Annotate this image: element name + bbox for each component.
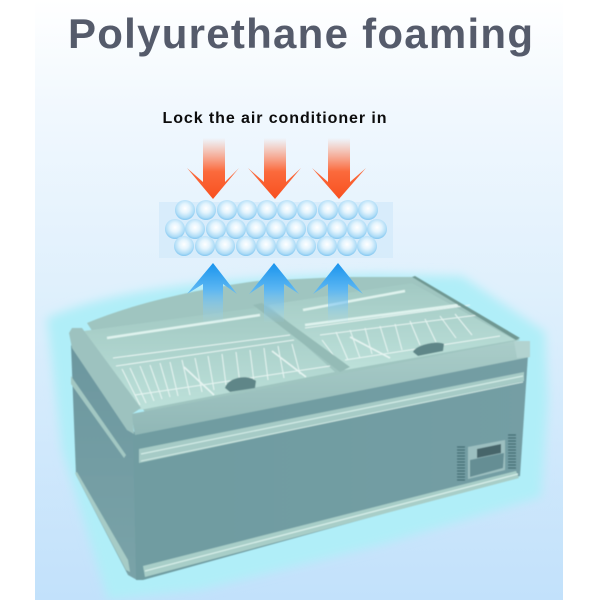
- back and right glass frame: [412, 276, 520, 340]
- right lid handle: [413, 343, 444, 356]
- freezer: [69, 276, 530, 580]
- centre divider rail: [253, 303, 350, 372]
- freezer left side face: [71, 345, 137, 580]
- foam bubbles: [165, 200, 387, 256]
- display and keypad: [468, 440, 505, 479]
- lower front trim: [143, 471, 519, 577]
- red arrows pointing down: [187, 138, 366, 199]
- right glass lid: [268, 283, 515, 370]
- left basket wire grid: [113, 335, 330, 405]
- title: Polyurethane foaming: [68, 10, 533, 57]
- subtitle: Lock the air conditioner in: [162, 110, 386, 127]
- blue arrows pointing up: [187, 263, 363, 322]
- front rim: [131, 341, 530, 435]
- left glass lid: [84, 307, 335, 410]
- right vent: [508, 435, 516, 468]
- foam layer band: [159, 202, 393, 258]
- aqua glow behind freezer: [47, 274, 548, 600]
- freezer front face: [133, 355, 528, 580]
- right basket wire grid: [305, 305, 500, 364]
- left rim: [69, 328, 141, 434]
- left vent: [457, 447, 465, 480]
- upper left side trim: [71, 376, 126, 458]
- control panel: [457, 435, 516, 480]
- curved glass canopy: [87, 277, 520, 420]
- rim corner: [514, 341, 530, 358]
- glass highlight bars: [107, 291, 458, 338]
- lower left side trim: [75, 472, 130, 572]
- upper front trim: [139, 372, 524, 463]
- left lid handle: [225, 377, 256, 392]
